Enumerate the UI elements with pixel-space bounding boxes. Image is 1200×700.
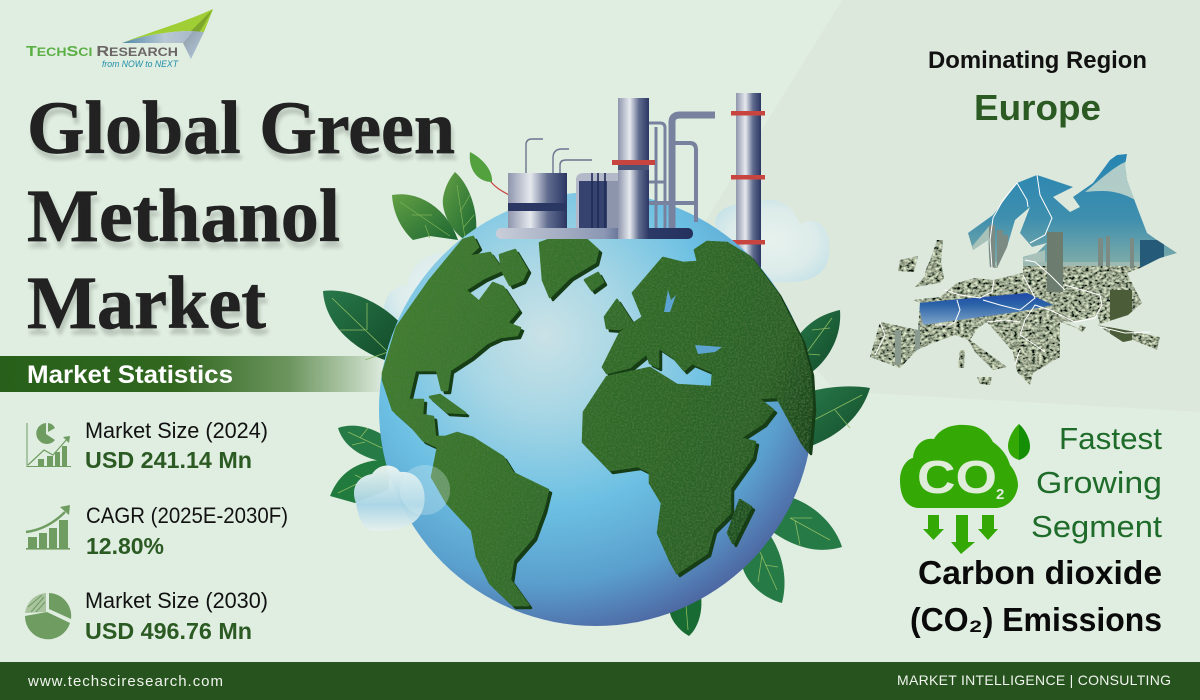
leaf: top upright — [443, 172, 476, 240]
refinery towers — [895, 225, 1164, 365]
icon: chart with pie — [27, 423, 71, 466]
title: Market — [27, 262, 266, 345]
footer bar — [0, 662, 1200, 700]
statistic: market size 2024 — [27, 418, 268, 473]
sky — [899, 154, 1177, 265]
storage tank — [508, 173, 567, 229]
Europe country borders — [875, 175, 1150, 365]
statistic: market size 2024: USD 241.14 Mn — [85, 447, 252, 473]
blue roof — [918, 293, 1053, 325]
title — [27, 87, 455, 345]
statistic: market size 2024: Market Size (2024) — [85, 418, 268, 443]
icon: leaf — [1008, 424, 1030, 460]
iceland — [585, 273, 603, 290]
large pipework — [649, 115, 715, 228]
front cloud — [354, 465, 450, 531]
cuba — [430, 395, 465, 413]
statistic: market size 2030: Market Size (2030) — [85, 588, 268, 613]
leaves around globe — [323, 152, 870, 636]
leaf: top left light — [392, 194, 458, 240]
segment label: Segment — [1031, 509, 1162, 544]
britain — [605, 300, 632, 329]
statistic: CAGR — [26, 503, 288, 559]
segment label: Fastest — [1059, 421, 1162, 456]
refinery — [496, 98, 715, 239]
fastest growing segment — [900, 421, 1162, 638]
map of Europe with refinery image — [870, 154, 1177, 385]
icon: CO2 cloud: 2 — [996, 486, 1004, 503]
statistic: market size 2030: USD 496.76 Mn — [85, 618, 252, 644]
main column — [612, 98, 655, 239]
leaf: bottom right — [742, 535, 785, 603]
title: Methanol — [27, 175, 340, 258]
icon: down arrows — [923, 515, 998, 554]
title: Global Green — [27, 87, 455, 170]
statistic: CAGR: 12.80% — [86, 533, 164, 559]
inland seas — [664, 290, 722, 354]
icon: pie chart — [25, 593, 71, 639]
globe — [379, 192, 813, 626]
footer bar: MARKET INTELLIGENCE | CONSULTING — [897, 672, 1171, 688]
clouds behind globe — [384, 200, 829, 340]
smokestack — [731, 93, 765, 278]
icon: rising bars — [26, 505, 70, 550]
leaf: bottom — [670, 596, 701, 636]
statistic: CAGR: CAGR (2025E-2030F) — [86, 503, 288, 528]
logo — [26, 9, 213, 70]
eurasia — [603, 242, 812, 451]
refinery texture — [870, 266, 1160, 385]
leaf: right upper — [795, 310, 840, 372]
ocean sphere — [379, 192, 813, 626]
dominating region heading — [928, 47, 1147, 128]
segment name: Carbon dioxide — [918, 554, 1162, 591]
footer bar: www.techsciresearch.com — [27, 673, 223, 690]
logo tagline: from NOW to NEXT — [102, 59, 179, 70]
leaf: left upper — [338, 426, 390, 462]
leaf: right lower — [770, 497, 842, 550]
logo wordmark: TECH SCI RESEARCH — [26, 43, 178, 60]
dominating region heading: Europe — [974, 87, 1101, 128]
segment name — [910, 554, 1162, 638]
logo swoosh — [122, 9, 213, 59]
continents — [383, 237, 812, 605]
segment label: Growing — [1036, 465, 1162, 500]
madagascar — [728, 500, 751, 543]
segment name: (CO₂) Emissions — [910, 601, 1162, 638]
market statistics banner — [0, 356, 385, 392]
americas — [383, 237, 548, 605]
statistic: market size 2030 — [25, 588, 268, 644]
leaf: small with red stem — [470, 152, 509, 195]
thin pipes on tank — [526, 139, 592, 173]
leaf: right middle — [808, 386, 870, 447]
segment label — [1031, 421, 1162, 544]
process unit — [576, 173, 618, 228]
icon: CO2 cloud — [900, 424, 1030, 554]
leaf: large left — [323, 290, 402, 360]
africa — [583, 368, 755, 573]
base platform — [496, 228, 693, 239]
leaf: left lower — [330, 460, 392, 503]
greenland — [540, 237, 598, 297]
icon: CO2 cloud: CO — [917, 451, 997, 503]
market statistics banner: Market Statistics — [27, 361, 233, 389]
dominating region heading: Dominating Region — [928, 47, 1147, 74]
arctic island — [500, 250, 527, 285]
